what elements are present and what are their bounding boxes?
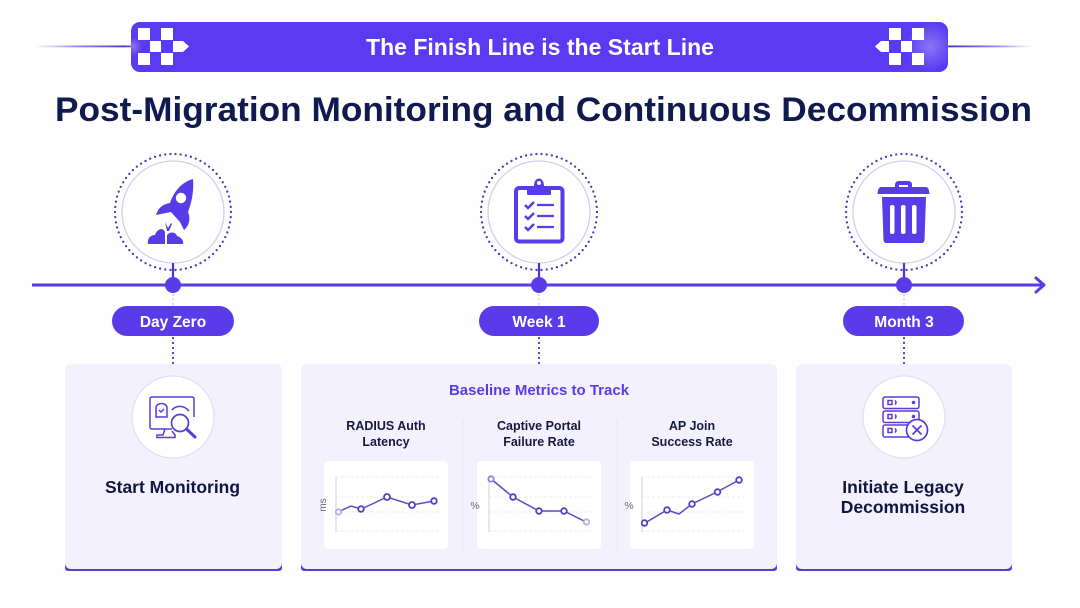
heading: Baseline Metrics to Track: Baseline Metrics to Track (449, 382, 630, 399)
panel: Baseline Metrics to Track (301, 364, 777, 571)
panel: Start Monitoring (65, 364, 282, 571)
icon: left checkered flag (138, 28, 189, 65)
chart: RADIUS Auth Latency: ms (318, 498, 329, 512)
chart: Captive Portal Failure Rate: Captive Portal (497, 419, 581, 433)
pill: Day Zero (112, 306, 234, 336)
milestone: Month 3 (843, 154, 964, 364)
heading: Initiate Legacy Decommission (841, 477, 965, 517)
icon: server with x (863, 376, 945, 458)
pill: Week 1: Week 1 (512, 314, 566, 331)
milestone: Week 1 (479, 154, 599, 364)
chart: Captive Portal Failure Rate (470, 419, 601, 549)
chart: AP Join Success Rate: Success Rate (651, 435, 733, 449)
pill: Month 3 (843, 306, 964, 336)
panel: Initiate Legacy Decommission (796, 364, 1012, 571)
chart: RADIUS Auth Latency (318, 419, 448, 549)
timeline arrow (32, 278, 1044, 292)
icon: clipboard (516, 178, 562, 242)
milestone: Day Zero (112, 154, 234, 364)
chart: Captive Portal Failure Rate: % (470, 500, 480, 512)
heading: Initiate Legacy Decommission: Initiate Legacy (842, 477, 964, 497)
heading: Initiate Legacy Decommission: Decommission (841, 497, 965, 517)
icon: monitor with magnifier (132, 376, 214, 458)
chart: RADIUS Auth Latency: Latency (362, 435, 410, 449)
banner (35, 22, 1032, 72)
icon: right checkered flag (875, 28, 924, 65)
icon: rocket (148, 179, 193, 244)
chart: RADIUS Auth Latency: RADIUS Auth (346, 419, 426, 433)
icon: trash can (878, 181, 930, 243)
title: Post-Migration Monitoring and Continuous Decommission (55, 91, 1032, 129)
heading: Start Monitoring: Start Monitoring (105, 477, 240, 497)
chart: AP Join Success Rate: AP Join (669, 419, 715, 433)
banner text: The Finish Line is the Start Line (366, 34, 714, 60)
pill: Month 3: Month 3 (874, 314, 934, 331)
chart: Captive Portal Failure Rate: Failure Rate (503, 435, 575, 449)
pill: Week 1 (479, 306, 599, 336)
chart: AP Join Success Rate: % (624, 500, 634, 512)
chart: AP Join Success Rate (624, 419, 754, 549)
pill: Day Zero: Day Zero (140, 314, 206, 331)
